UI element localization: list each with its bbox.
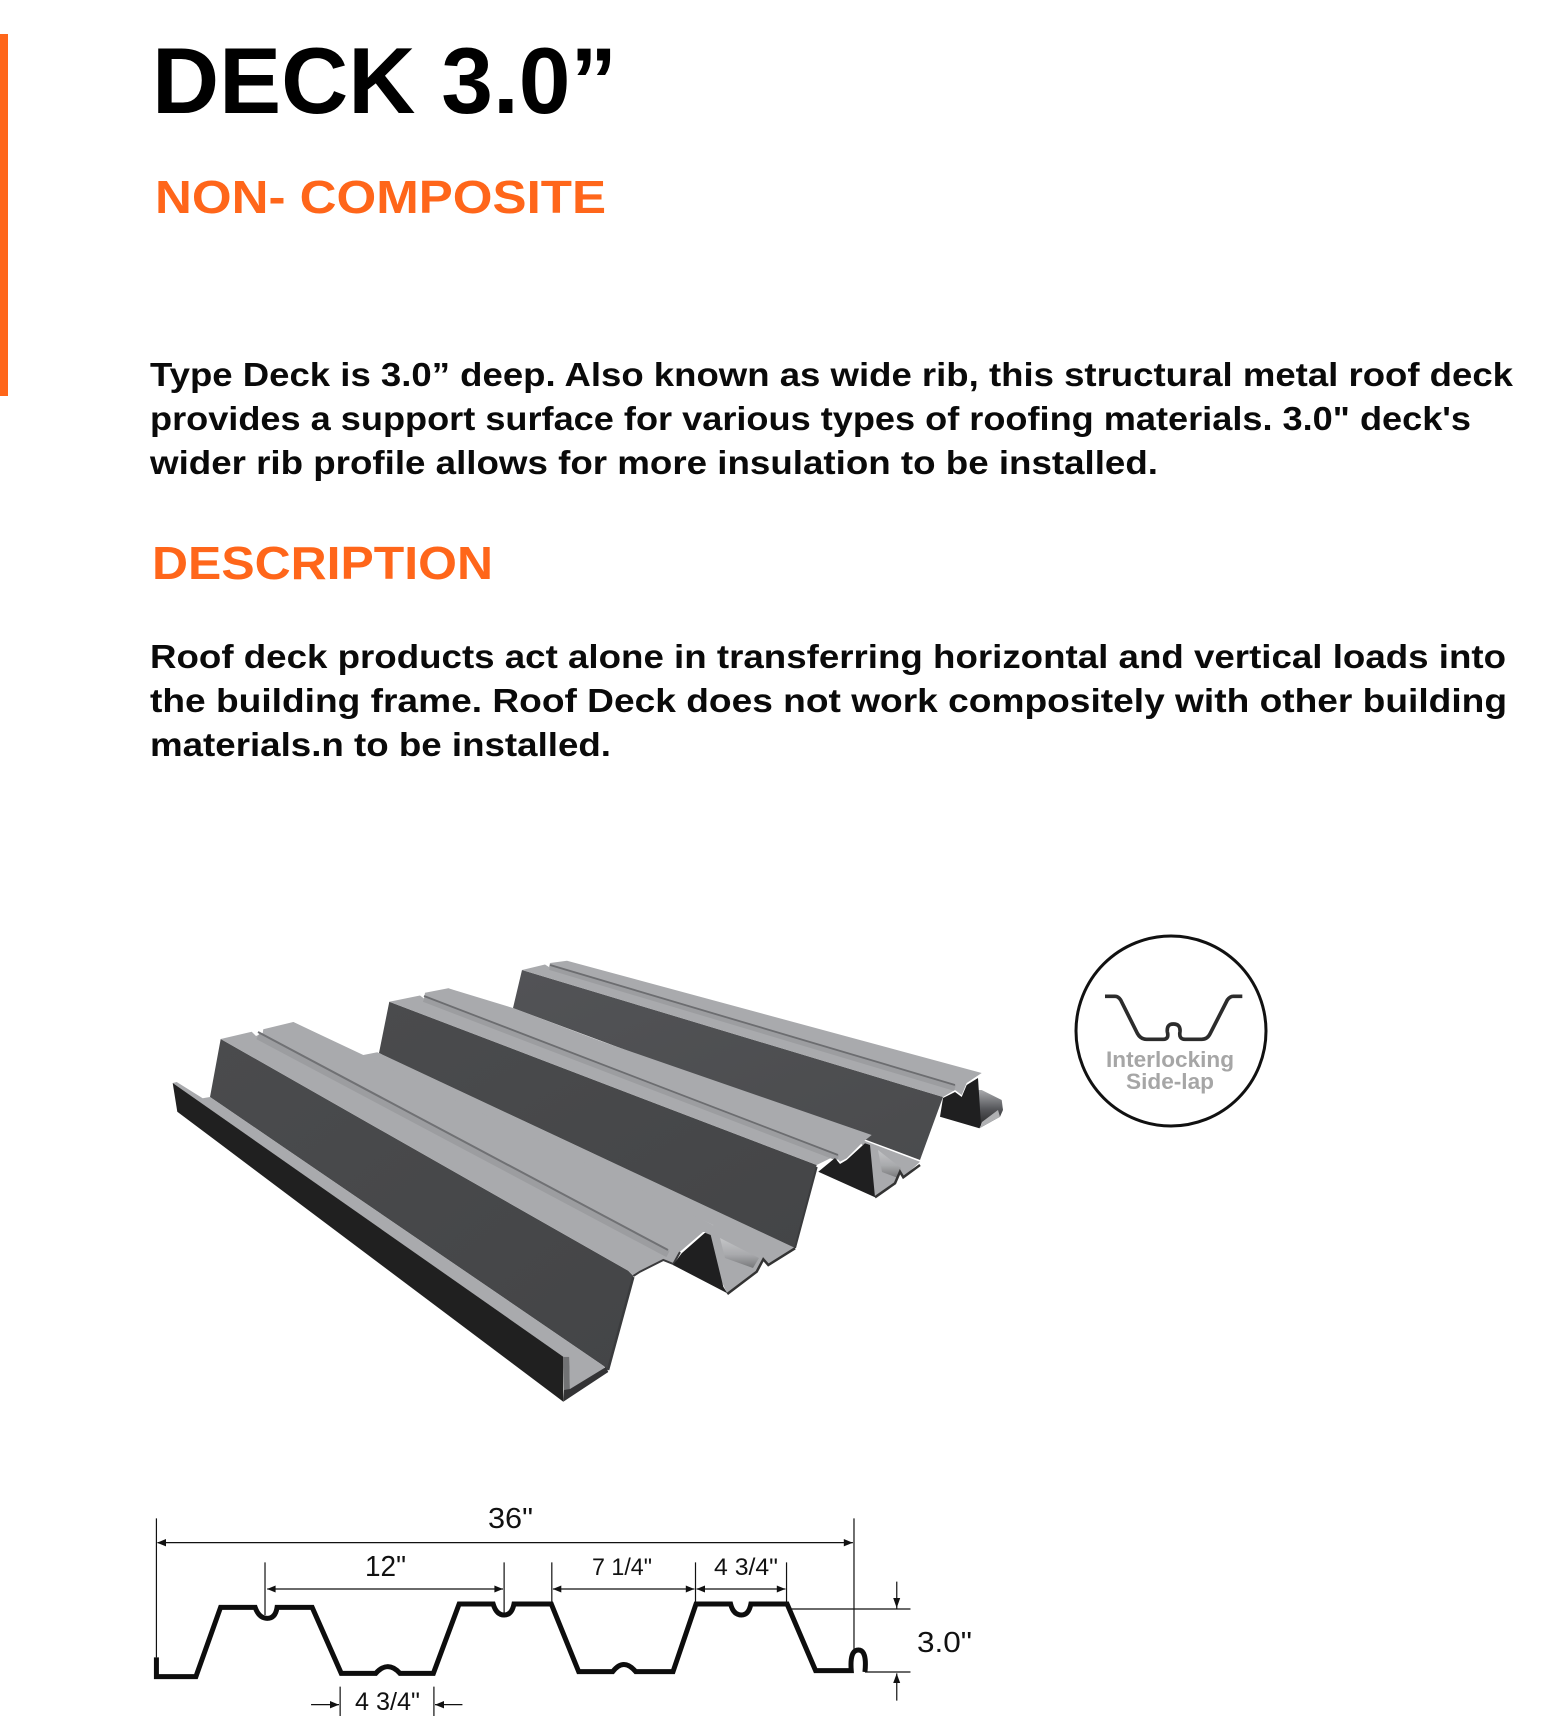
back web [513, 970, 943, 1160]
section profile diagram: 7 1/4" [592, 1554, 652, 1581]
front flange dark face [173, 1083, 563, 1402]
dimension lines [156, 1518, 910, 1716]
front web [210, 1039, 633, 1370]
section profile diagram [156, 1503, 972, 1716]
intro paragraph: wider rib profile allows for more insulation to be installed. [149, 444, 1158, 481]
section profile diagram: 4 3/4" [355, 1688, 420, 1716]
orange accent bar [0, 34, 8, 396]
interlocking side-lap badge: Side-lap [1126, 1069, 1214, 1094]
interlocking side-lap badge [1076, 936, 1266, 1126]
section profile diagram: 12" [365, 1551, 406, 1583]
dimension arrowheads [157, 1539, 900, 1708]
description paragraph [150, 638, 1507, 763]
intro paragraph: provides a support surface for various types of roofing materials. 3.0" deck's [150, 400, 1471, 437]
intro paragraph [149, 356, 1514, 481]
section profile diagram: 4 3/4" [714, 1554, 778, 1581]
third pan [435, 988, 920, 1197]
side-lap profile icon [1105, 996, 1242, 1039]
back rib top [522, 961, 982, 1097]
badge label: Interlocking [1106, 1047, 1234, 1072]
pan end edge [563, 1357, 570, 1392]
description paragraph: materials.n to be installed. [150, 726, 611, 763]
middle rib top [389, 988, 872, 1165]
heading: description: DESCRIPTION [152, 537, 493, 589]
back end flange [976, 1090, 1003, 1128]
section profile diagram: 3.0" [917, 1627, 972, 1659]
subtitle: NON- COMPOSITE [155, 171, 606, 223]
back rib end [940, 1078, 981, 1128]
3D roof deck illustration [173, 961, 1003, 1402]
badge circle [1076, 936, 1266, 1126]
description paragraph: Roof deck products act alone in transferring horizontal and vertical loads into [150, 638, 1506, 675]
dimension labels: 36" [488, 1503, 533, 1535]
intro paragraph: Type Deck is 3.0” deep. Also known as wide rib, this structural metal roof deck [150, 356, 1514, 393]
second pan and front rib far side [280, 1022, 795, 1294]
front rib top [221, 1022, 713, 1276]
title: DECK 3.0” [152, 28, 617, 133]
front rib end [673, 1233, 727, 1293]
middle rib end [818, 1143, 875, 1197]
description paragraph: the building frame. Roof Deck does not work compositely with other building [150, 682, 1507, 719]
deck profile line [156, 1604, 865, 1677]
middle web [379, 1002, 817, 1248]
bottom pan [173, 1082, 608, 1392]
